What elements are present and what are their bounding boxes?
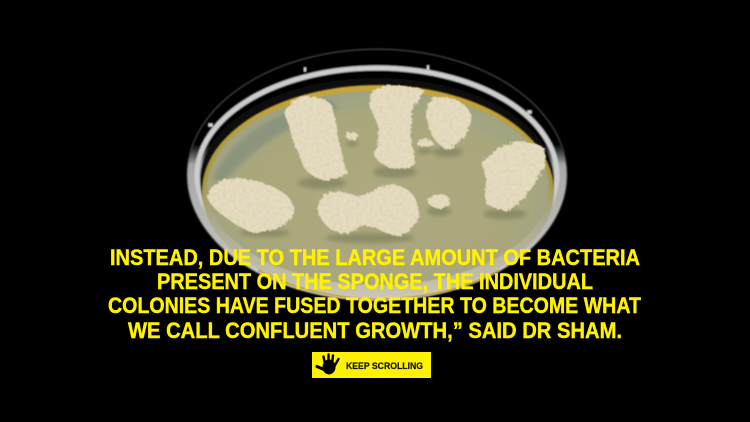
colony: finger 1	[285, 97, 346, 179]
icon: hand	[317, 354, 338, 374]
headline text: WE CALL CONFLUENT GROWTH,” SAID DR SHAM.	[128, 318, 622, 343]
gold line along dish bottom	[258, 270, 500, 299]
headline text: COLONIES HAVE FUSED TOGETHER TO BECOME WHAT	[108, 293, 641, 318]
colony: palm dumbbell	[318, 185, 418, 235]
tick marks on rim	[208, 65, 532, 127]
keep scrolling button	[312, 352, 431, 378]
headline text	[108, 245, 641, 343]
colony shadows	[240, 141, 527, 243]
agar surface	[207, 91, 549, 285]
colony: small dot 1	[347, 133, 357, 139]
colony: thumb	[483, 143, 544, 210]
headline text: INSTEAD, DUE TO THE LARGE AMOUNT OF BACTERIA	[110, 245, 640, 270]
colony: lower left	[208, 179, 293, 232]
dish outer wall	[187, 49, 567, 301]
colony: finger 3	[427, 98, 470, 149]
petri dish	[187, 49, 567, 301]
bacterial colonies	[208, 86, 544, 235]
headline text: PRESENT ON THE SPONGE, THE INDIVIDUAL	[157, 269, 593, 294]
grey-green upper left band	[212, 100, 340, 182]
colony: small dot 3	[429, 195, 449, 207]
colony: finger 2	[370, 86, 423, 168]
button label: KEEP SCROLLING	[346, 361, 423, 371]
gold meniscus and pale lower edge	[202, 85, 554, 297]
colony: small dot 2	[418, 140, 432, 146]
